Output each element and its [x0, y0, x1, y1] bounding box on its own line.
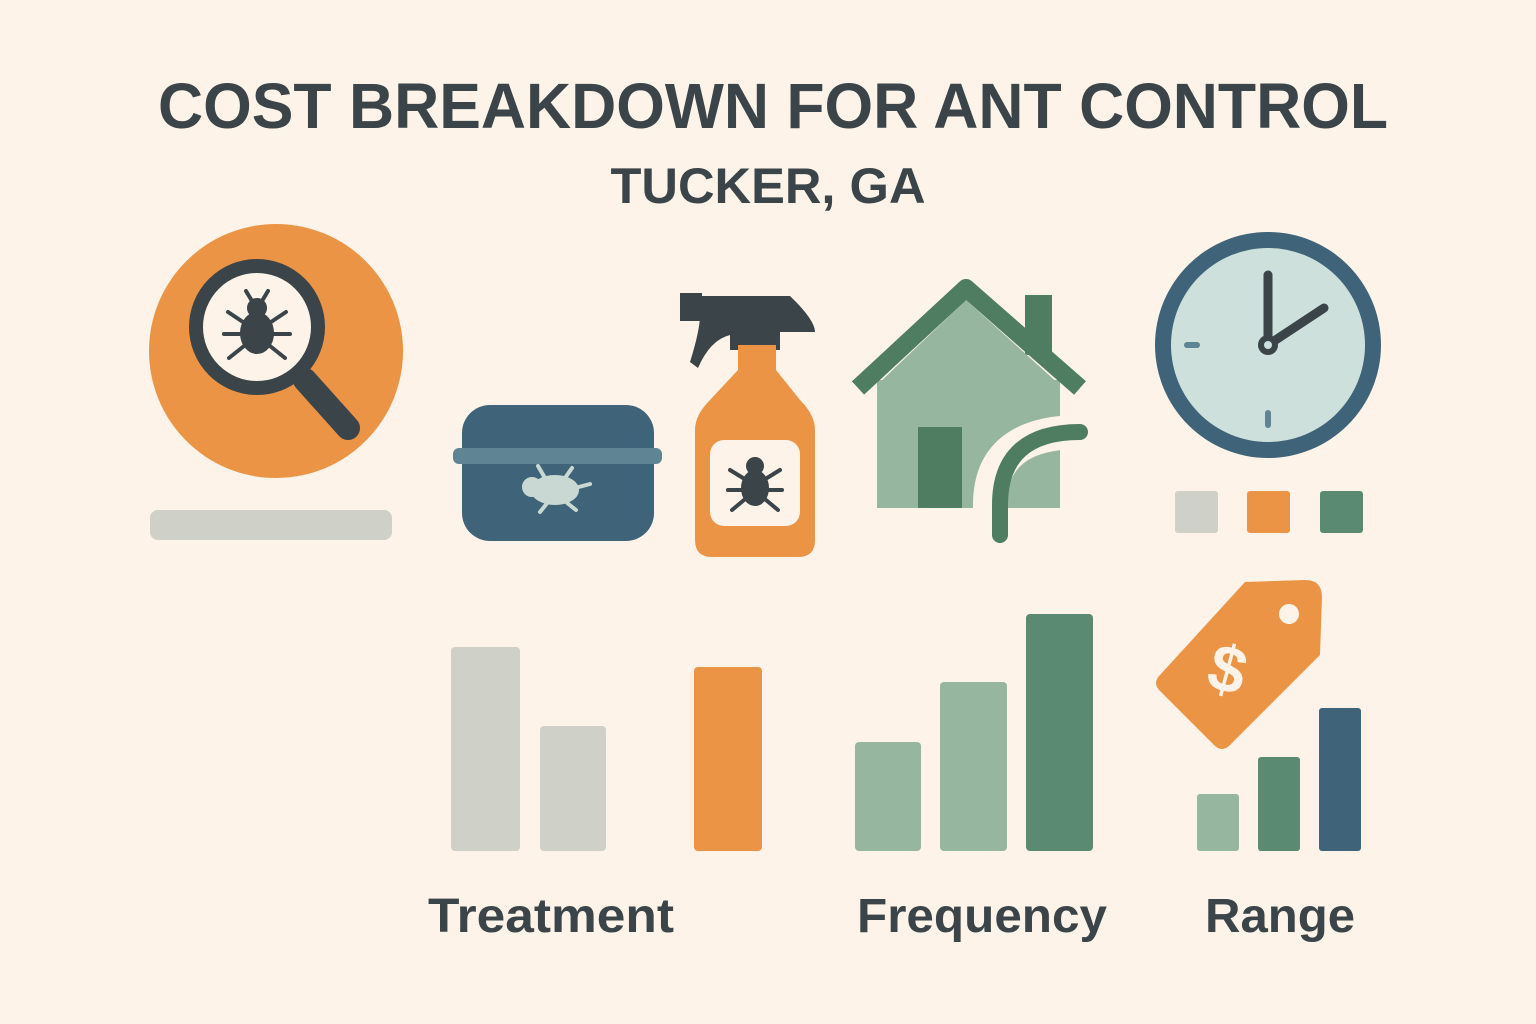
icon: bait box	[453, 405, 662, 541]
label: frequency: Frequency	[857, 890, 1107, 943]
label: range: Range	[1205, 890, 1355, 943]
icon: house	[858, 288, 1080, 540]
icon: spray bottle	[680, 293, 815, 557]
legend squares	[1175, 491, 1363, 533]
label: treatment: Treatment	[428, 890, 674, 943]
icon: price tag	[1156, 580, 1322, 749]
bar chart: treatment	[451, 647, 762, 851]
subtitle: TUCKER, GA	[610, 158, 926, 214]
icon: price tag: $	[1200, 628, 1255, 709]
bar chart: frequency	[855, 614, 1093, 851]
bar chart: range	[1197, 708, 1361, 851]
icon: clock	[1155, 232, 1381, 458]
gray bar	[150, 510, 392, 540]
title: COST BREAKDOWN FOR ANT CONTROL	[158, 70, 1388, 142]
icon: magnifier inspection	[149, 224, 403, 478]
